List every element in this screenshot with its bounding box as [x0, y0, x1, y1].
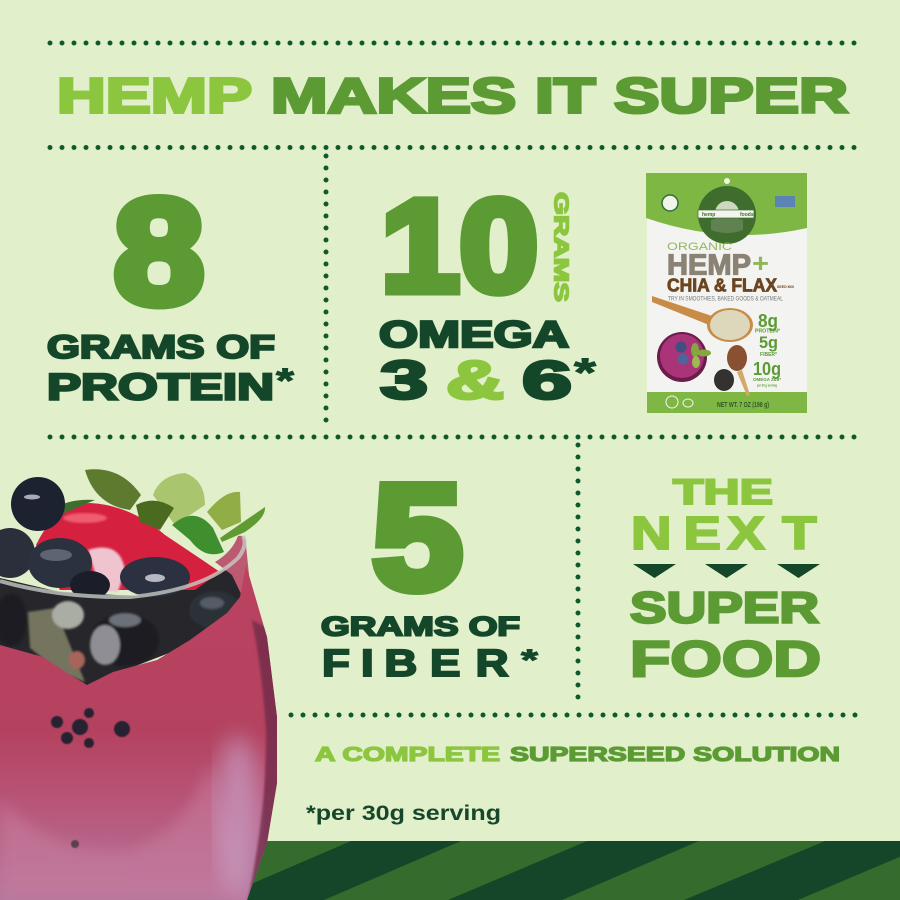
stat: 10 grams omega 3 and 6: *: [574, 351, 597, 395]
stat: 10 grams omega 3 and 6: 3: [380, 350, 428, 410]
stat: 8 grams of protein: *: [276, 362, 295, 400]
stat: 5 grams of fiber: *: [521, 644, 538, 677]
glass interior with berries: [0, 560, 246, 690]
footnote: *per 30g serving: [306, 802, 501, 825]
package nutrition facts: 10g: [753, 359, 781, 379]
seeds: [51, 708, 130, 848]
package nutrition facts: 8g: [758, 311, 778, 331]
stat: 10 grams omega 3 and 6: GRAMS: [550, 192, 572, 302]
callout: the next super food: SUPER: [630, 584, 819, 632]
striped footer band: [247, 841, 900, 900]
stat: 5 grams of fiber: [321, 454, 538, 684]
package name: +: [752, 248, 769, 278]
package name: TRY IN SMOOTHIES, BAKED GOODS & OATMEAL: [668, 296, 783, 302]
strawberry: [36, 503, 220, 592]
leaves: [50, 469, 265, 554]
package nutrition facts: 5g: [759, 333, 778, 352]
stat: 10 grams omega 3 and 6: 6: [522, 350, 572, 410]
package nutrition facts: [753, 311, 781, 388]
hemp spoon: [652, 296, 753, 342]
package nutrition facts: per 30 g serving: [757, 384, 777, 388]
stat: 10 grams omega 3 and 6: OMEGA: [379, 314, 569, 355]
package nutrition facts: FIBER*: [760, 352, 777, 358]
callout: the next super food: THE: [673, 473, 773, 512]
stat: 10 grams omega 3 and 6: 10: [381, 172, 538, 319]
stat: 10 grams omega 3 and 6: &: [446, 350, 504, 410]
hang hole: [724, 178, 730, 184]
arrows: [633, 564, 820, 578]
stat: 8 grams of protein: 8: [114, 168, 204, 335]
stat: 8 grams of protein: [47, 168, 295, 408]
package name: HEMP: [667, 250, 751, 282]
tagline: SUPERSEED SOLUTION: [510, 744, 840, 766]
stat: 8 grams of protein: PROTEIN: [47, 366, 274, 408]
brand logo: hemp: [702, 212, 715, 218]
stat: 5 grams of fiber: 5: [372, 454, 462, 620]
smoothie bowl: [657, 332, 711, 382]
package nutrition facts: OMEGA 3&6*: [753, 377, 781, 382]
title: [57, 70, 848, 124]
title: MAKES IT SUPER: [271, 70, 848, 124]
package top green panel: [646, 173, 807, 235]
package nutrition facts: PROTEIN*: [755, 328, 780, 334]
flax and chia spoons: [714, 345, 750, 396]
stat: 5 grams of fiber: GRAMS OF: [321, 612, 520, 642]
smoothie: [0, 565, 277, 900]
title: HEMP: [57, 70, 252, 124]
smoothie shading: [0, 620, 290, 900]
callout: the next super food: NEXT: [631, 508, 817, 559]
package name: [667, 241, 794, 302]
brand logo: foods: [740, 212, 754, 218]
organic seal: [662, 195, 678, 211]
tagline: A COMPLETE: [315, 744, 500, 766]
glass rim: [0, 536, 245, 597]
blueberries: [0, 477, 190, 599]
callout: the next super food: FOOD: [630, 631, 821, 687]
non-GMO badge: [775, 196, 795, 207]
stat: 10 grams omega 3 and 6: [379, 172, 597, 410]
tagline: [315, 744, 840, 766]
package name: CHIA & FLAX: [667, 276, 777, 296]
package bottom green panel: [647, 392, 807, 413]
certification icons: [666, 396, 693, 408]
net weight: NET WT. 7 OZ (198 g): [717, 402, 769, 409]
stat: 5 grams of fiber: FIBER: [322, 642, 509, 684]
callout: the next super food: [630, 473, 821, 687]
product package: [646, 173, 807, 413]
smoothie glass photo: [0, 469, 290, 900]
package name: ORGANIC: [667, 241, 732, 253]
stat: 8 grams of protein: GRAMS OF: [47, 329, 275, 365]
pink reflection in glass wall: [215, 536, 249, 598]
package name: SEED MIX: [777, 284, 794, 289]
brand logo: [698, 186, 756, 244]
frosted fruit inside glass: [0, 591, 241, 682]
package body: [647, 173, 807, 413]
